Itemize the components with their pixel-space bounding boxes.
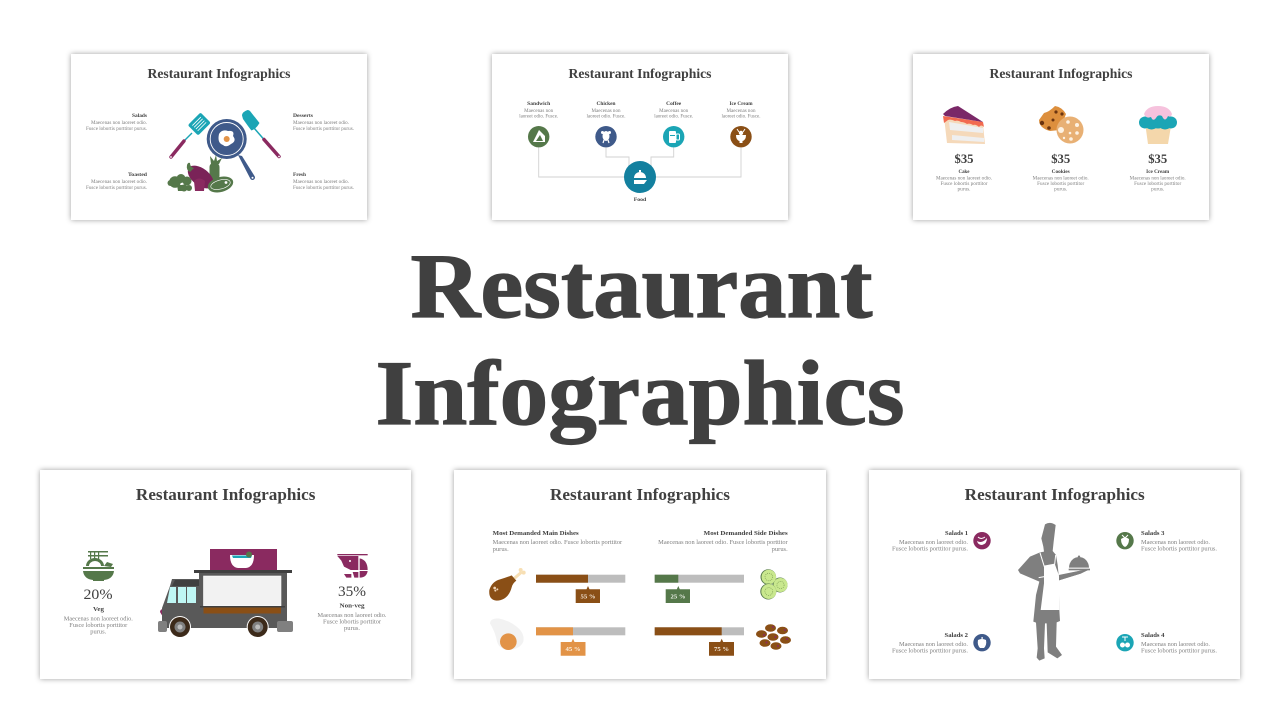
stat: Non-veg 35%: 35% [338, 584, 366, 600]
main title [376, 235, 904, 444]
stat: Veg 20%: purus. [90, 628, 107, 636]
column: Chicken [586, 102, 626, 147]
text block: Desserts: Desserts [293, 114, 313, 119]
item: Salads 1: Salads 1 [945, 531, 968, 537]
price column: Ice Cream: Ice Cream [1146, 170, 1170, 175]
bar: main dish 45% [536, 627, 625, 656]
text block: main dishes: Maecenas non laoreet odio. Fusce lobortis porttitor [493, 539, 622, 546]
column: Coffee [654, 102, 693, 147]
icon: chicken drumstick [489, 568, 526, 601]
panel heading: Restaurant Infographics [550, 485, 731, 504]
column: Coffee: Maecenas non [659, 109, 689, 114]
central node: Food: Food [634, 197, 646, 203]
price column: Cake: $35 [954, 151, 974, 166]
item: Salads 4: Salads 4 [1141, 633, 1164, 639]
icon: cookies [1039, 106, 1084, 144]
panel: food truck veg and non-veg [40, 470, 411, 679]
column: Chicken: laoreet odio. Fusce. [586, 114, 626, 120]
panel heading: Restaurant Infographics [990, 66, 1132, 81]
stat: Non-veg 35%: Maecenas non laoreet odio. [318, 612, 387, 619]
stat: Veg 20%: Maecenas non laoreet odio. [64, 616, 133, 622]
column: Sandwich [519, 102, 558, 147]
text block: Desserts [293, 114, 354, 132]
text block: side dishes: Most Demanded Side Dishes [704, 531, 788, 537]
stat: Veg 20%: 20% [84, 587, 112, 603]
icon: fried egg [490, 618, 524, 650]
text block: Fresh: Maecenas non laoreet odio. [293, 180, 349, 185]
stat: Non-veg 35%: purus. [344, 625, 360, 632]
text block: Toasted: Toasted [128, 173, 147, 178]
price column: Ice Cream [1130, 151, 1186, 192]
stat: Non-veg 35% [318, 584, 387, 632]
text block: Toasted: Maecenas non laoreet odio. [91, 180, 147, 185]
price column: Cake [936, 151, 992, 192]
price column: Cookies: $35 [1051, 151, 1071, 166]
text block: Salads [86, 114, 147, 132]
price column: Cookies: Cookies [1052, 170, 1070, 175]
panel heading: Restaurant Infographics [965, 485, 1145, 504]
column: Ice Cream [722, 102, 760, 147]
icon: frying pan with egg [207, 119, 255, 180]
text block: side dishes [658, 531, 788, 553]
item: Salads 3: Salads 3 [1141, 531, 1164, 537]
item: Salads 2: Salads 2 [944, 633, 968, 639]
main title: Restaurant [410, 235, 873, 337]
column: Chicken: Maecenas non [592, 109, 621, 114]
stat: Veg 20%: Fusce lobortis porttitor [69, 622, 127, 629]
text block: Toasted: Fusce lobortis porttitor purus. [86, 186, 147, 191]
price column: Cake: Maecenas non laoreet odio. [936, 176, 992, 182]
bar: side dish 25% [655, 575, 744, 603]
panel: chef and salads [869, 470, 1240, 679]
text block: Salads: Fusce lobortis porttitor purus. [86, 127, 147, 132]
column: Ice Cream: laoreet odio. Fusce. [722, 114, 760, 120]
item: Salads 3: Maecenas non laoreet odio. [1141, 539, 1210, 546]
text block: main dishes: Most Demanded Main Dishes [493, 531, 579, 537]
price column: Cookies: purus. [1054, 188, 1067, 192]
text block: main dishes: purus. [493, 546, 509, 553]
item: Salads 4: Maecenas non laoreet odio. [1141, 641, 1210, 648]
item: Salads 1: Fusce lobortis porttitor purus. [892, 546, 968, 553]
icon: vegetables and steak [168, 155, 235, 195]
bar: main dish 55%: 55 % [580, 594, 596, 600]
text block: Fresh: Fusce lobortis porttitor purus. [293, 186, 354, 191]
icon: cake slice [943, 106, 985, 144]
price column: Ice Cream: Fusce lobortis porttitor [1134, 182, 1182, 187]
price column: Ice Cream: $35 [1148, 151, 1168, 166]
bar: side dish 25%: 25 % [670, 594, 686, 600]
bar: side dish 75% [655, 627, 744, 656]
price column: Cookies: Maecenas non laoreet odio. [1033, 176, 1089, 182]
icon: salad bowl [83, 551, 114, 581]
item: Salads 2 [892, 633, 991, 655]
panel: dessert prices [913, 54, 1209, 220]
icon: chef silhouette [1018, 523, 1090, 661]
column: Chicken: Chicken [596, 102, 616, 107]
stat: Veg 20% [64, 587, 133, 636]
panel: food tree diagram [492, 54, 788, 220]
item: Salads 3: Fusce lobortis porttitor purus. [1141, 546, 1217, 553]
panel heading: Restaurant Infographics [568, 66, 712, 81]
price column: Cake: purus. [958, 188, 970, 192]
stat: Non-veg 35%: Fusce lobortis porttitor [323, 618, 381, 626]
stat: Non-veg 35%: Non-veg [340, 604, 364, 610]
item: Salads 3 [1116, 531, 1217, 553]
price column: Ice Cream: Maecenas non laoreet odio. [1130, 176, 1186, 182]
text block: main dishes [493, 531, 622, 553]
text block: Toasted [86, 173, 147, 191]
item: Salads 4 [1116, 633, 1217, 655]
price column: Ice Cream: purus. [1151, 188, 1164, 192]
price column: Cookies [1033, 151, 1089, 192]
icon: cucumber slices [760, 569, 788, 600]
connector lines [539, 147, 741, 177]
column: Ice Cream: Ice Cream [730, 102, 753, 107]
bar: main dish 55% [536, 575, 625, 603]
text block: Desserts: Fusce lobortis porttitor purus. [293, 127, 354, 132]
column: Ice Cream: Maecenas non [726, 109, 756, 114]
text block: Salads: Maecenas non laoreet odio. [91, 121, 147, 126]
panel: cooking utensils and categories [71, 54, 367, 220]
text block: Fresh [293, 173, 354, 191]
bar: main dish 45%: 45 % [566, 646, 580, 653]
text block: Fresh: Fresh [293, 173, 306, 178]
column: Coffee: laoreet odio. Fusce. [654, 114, 693, 120]
item: Salads 1 [892, 531, 991, 553]
icon: food truck [158, 549, 293, 638]
icon: solid spatula [242, 110, 280, 157]
bar: side dish 75%: 75 % [714, 646, 729, 653]
text block: side dishes: purus. [772, 546, 788, 553]
panel heading: Restaurant Infographics [136, 485, 316, 504]
stat: Veg 20%: Veg [93, 607, 104, 613]
main title: Infographics [376, 342, 904, 444]
text block: Desserts: Maecenas non laoreet odio. [293, 121, 349, 126]
text block: side dishes: Maecenas non laoreet odio. Fusce lobortis porttitor [658, 539, 788, 546]
column: Coffee: Coffee [666, 102, 682, 107]
icon: cupcake [1139, 106, 1177, 144]
price column: Cake: Cake [958, 170, 970, 175]
price column: Cake: Fusce lobortis porttitor [940, 182, 988, 187]
item: Salads 2: Fusce lobortis porttitor purus. [892, 648, 968, 655]
central node: Food [624, 161, 656, 203]
column: Sandwich: laoreet odio. Fusce. [519, 114, 558, 120]
icon: slotted spatula [170, 112, 211, 158]
price column: Cookies: Fusce lobortis porttitor [1037, 182, 1085, 187]
column: Sandwich: Maecenas non [524, 109, 554, 114]
icon: beans [756, 624, 791, 650]
item: Salads 4: Fusce lobortis porttitor purus. [1141, 648, 1217, 655]
item: Salads 2: Maecenas non laoreet odio. [899, 641, 968, 648]
panel heading: Restaurant Infographics [148, 66, 290, 81]
text block: Salads: Salads [132, 114, 147, 119]
icon: shrimp [337, 554, 368, 578]
column: Sandwich: Sandwich [527, 102, 550, 107]
panel: most demanded dishes [454, 470, 826, 679]
item: Salads 1: Maecenas non laoreet odio. [899, 539, 968, 546]
